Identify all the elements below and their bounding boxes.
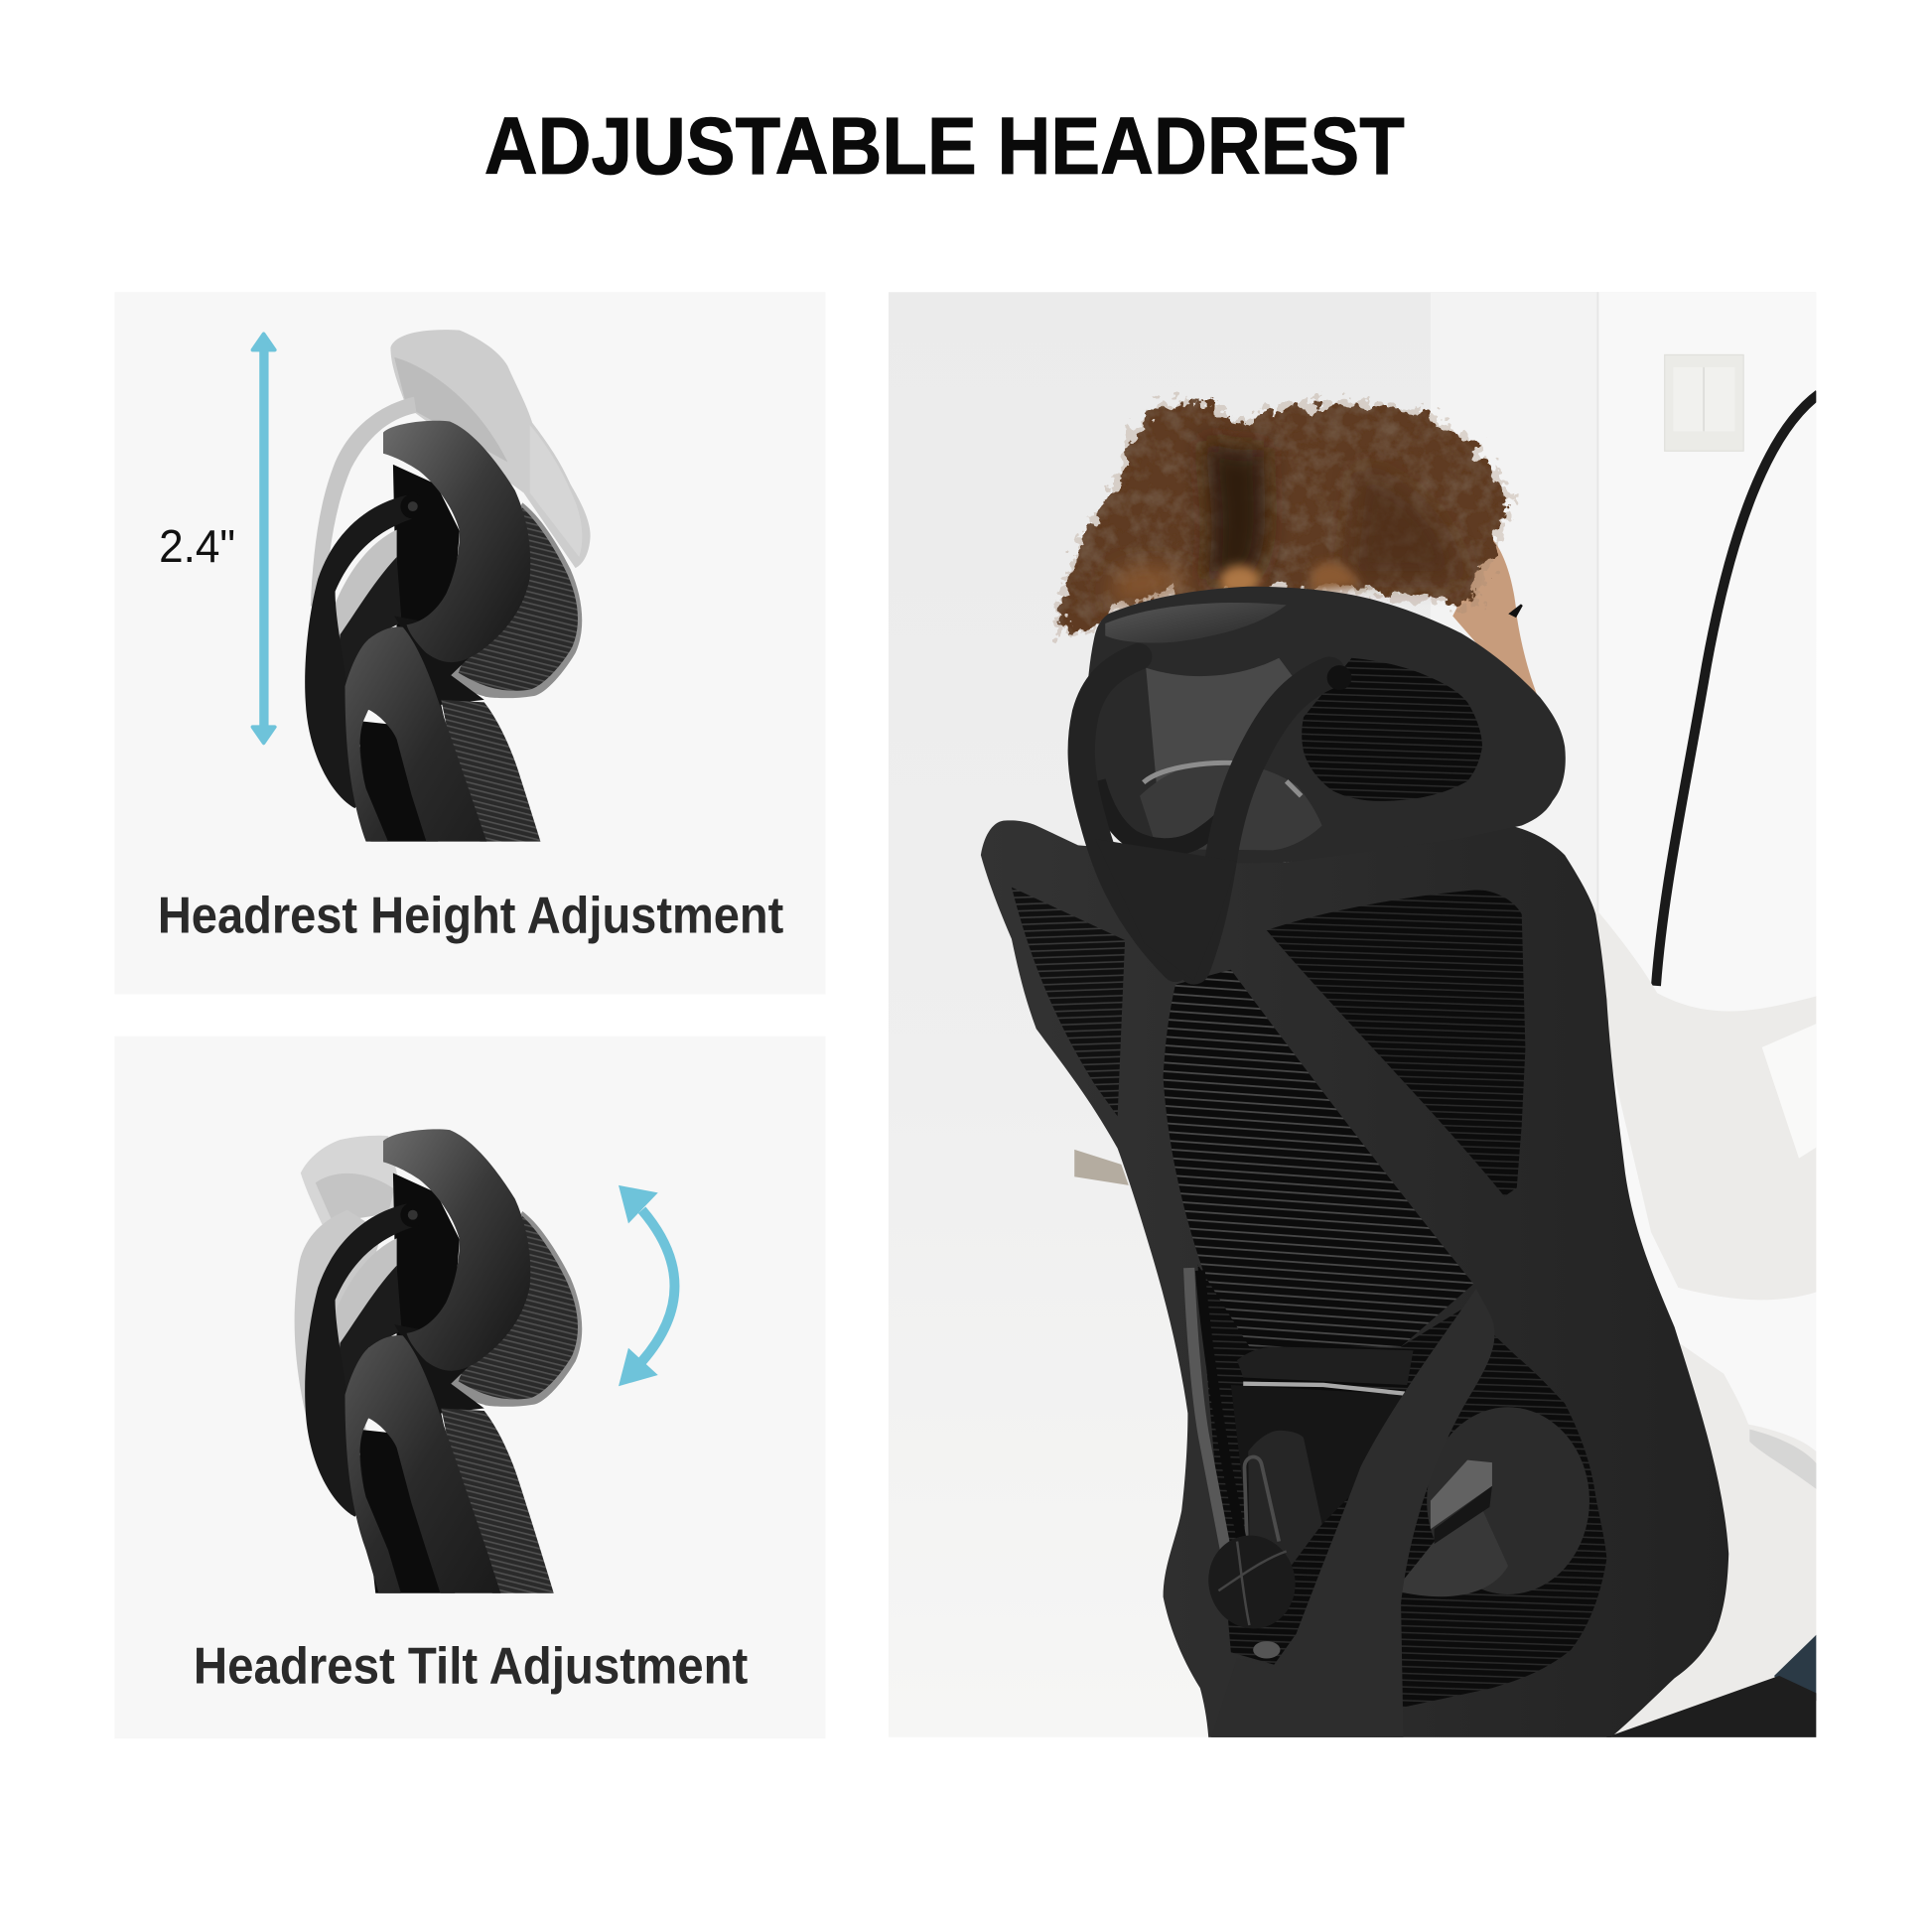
- arrow: vertical height range: [252, 334, 275, 743]
- icon: headrest side view: [305, 421, 582, 888]
- label: height: Headrest Height Adjustment: [158, 887, 783, 944]
- headrest top plate highlight: [1105, 603, 1287, 643]
- mesh: upper right: [1267, 890, 1525, 1196]
- lumbar highlight: [1243, 1384, 1405, 1394]
- mesh: center: [1164, 970, 1473, 1346]
- knob recess: [1253, 1641, 1280, 1658]
- tension knob: [1208, 1535, 1295, 1628]
- bracket arm: [1081, 656, 1329, 981]
- inner loop: [1097, 781, 1227, 848]
- headrest shell: [1086, 587, 1566, 864]
- label: tilt: Headrest Tilt Adjustment: [194, 1637, 748, 1695]
- slot bracket: [1244, 1431, 1322, 1573]
- skin: neck and face: [1452, 540, 1537, 694]
- vertical rod: [1189, 1268, 1233, 1590]
- icon: faded tilted headrest: [295, 1136, 407, 1516]
- trousers and seat: [1599, 1632, 1819, 1739]
- headrest center plate: [1146, 658, 1293, 782]
- bracket pivot: [1327, 665, 1351, 690]
- mesh: lower: [1197, 1264, 1606, 1708]
- shirt: [1587, 898, 1819, 1739]
- mesh: left wing: [1012, 888, 1125, 1116]
- cable: [1656, 394, 1819, 986]
- icon: headrest side view tilted: [305, 1129, 582, 1595]
- lumbar plate: [1231, 1385, 1410, 1542]
- arrow: tilt arc: [619, 1185, 674, 1386]
- table edge: [1074, 1150, 1129, 1185]
- title: ADJUSTABLE HEADREST: [484, 101, 1405, 192]
- panel: headrest tilt adjustment: [197, 1129, 748, 1694]
- cradle highlight: [1144, 762, 1302, 796]
- headrest mesh: [1302, 658, 1482, 801]
- icon: faded raised headrest: [311, 330, 591, 607]
- hair: [1061, 404, 1504, 632]
- headrest cradle: [1140, 763, 1322, 850]
- panel: photo of person in chair: [889, 292, 1819, 1741]
- lumbar pad: [1237, 1346, 1414, 1385]
- chair: back frame: [981, 587, 1728, 1741]
- lumbar disc: [1427, 1407, 1589, 1594]
- wall: [889, 292, 1816, 1737]
- panel: headrest height adjustment: [114, 292, 826, 995]
- text: 2.4 inches: 2.4": [159, 520, 235, 572]
- light switch: [1665, 354, 1743, 451]
- lumbar lever: [1395, 1460, 1508, 1596]
- cross strut: [1210, 1289, 1494, 1741]
